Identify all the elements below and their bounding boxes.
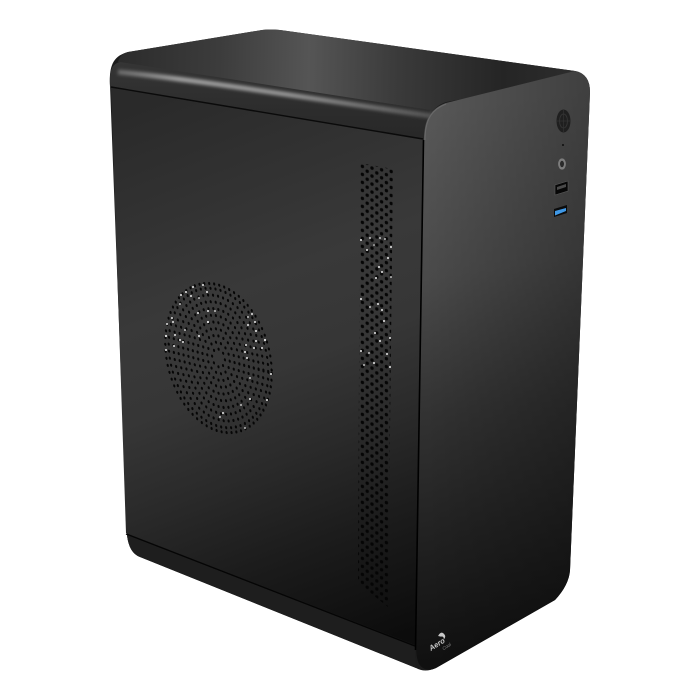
front panel — [416, 71, 590, 670]
bottom seam — [126, 534, 415, 646]
fan grille highlights — [165, 284, 272, 429]
bottom lip — [127, 535, 416, 668]
brand logo: Cool — [441, 641, 453, 651]
brand logo — [425, 631, 453, 657]
top seam — [111, 87, 423, 139]
power button — [558, 158, 566, 170]
LED indicator — [562, 144, 564, 146]
side fan grille — [165, 270, 272, 446]
top face — [118, 30, 585, 118]
side vent grille — [358, 163, 393, 607]
brand logo: Aero — [426, 636, 447, 653]
top bevel band — [110, 62, 432, 140]
vent highlights — [360, 237, 392, 368]
case silhouette — [110, 30, 590, 670]
front panel edge highlight — [425, 104, 446, 140]
front panel left shadow — [416, 140, 424, 650]
USB 2.0 port — [555, 181, 568, 195]
side panel — [111, 87, 423, 646]
USB 3.0 port — [554, 205, 567, 217]
front speaker vent — [556, 110, 570, 132]
